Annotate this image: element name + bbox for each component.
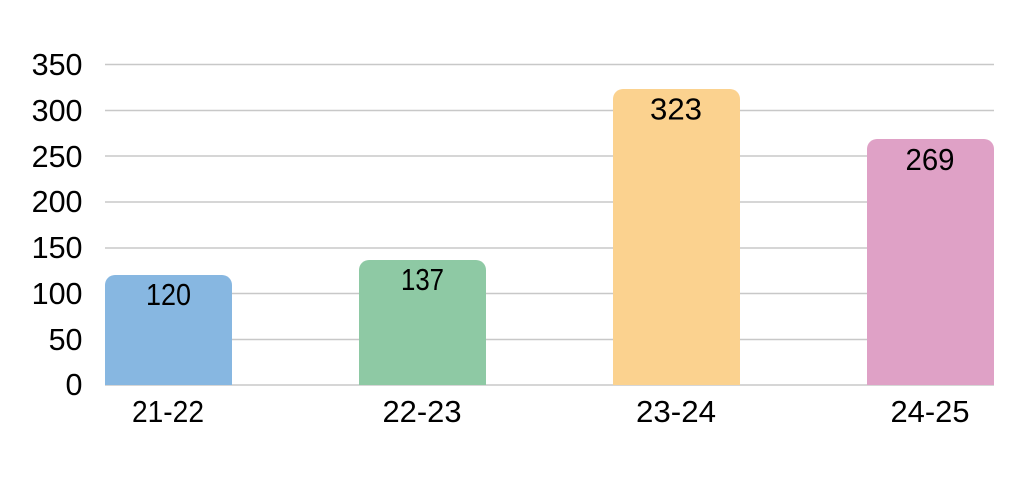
bar: 23-24: 323 [650, 92, 702, 126]
y axis labels: 350 [32, 48, 82, 82]
y axis labels: 200 [32, 185, 82, 219]
x axis labels: 22-23 [382, 395, 462, 429]
y axis labels: 0 [66, 368, 82, 402]
bar: 23-24 [613, 89, 740, 385]
y axis labels: 250 [32, 140, 82, 174]
y axis labels: 50 [49, 323, 82, 357]
y axis labels: 150 [32, 231, 82, 265]
y axis labels: 300 [32, 94, 82, 128]
x axis labels: 24-25 [890, 395, 970, 429]
y axis labels [32, 48, 82, 402]
x axis labels: 21-22 [132, 395, 204, 429]
x axis labels [132, 395, 970, 429]
bar: 24-25 [867, 139, 994, 385]
x axis labels: 23-24 [636, 395, 716, 429]
bar: 21-22 [105, 275, 232, 385]
bar: 22-23 [359, 260, 486, 385]
bar: 24-25: 269 [906, 143, 954, 177]
bar: 21-22: 120 [146, 278, 191, 312]
y axis labels: 100 [32, 277, 82, 311]
bar: 22-23: 137 [401, 263, 444, 297]
